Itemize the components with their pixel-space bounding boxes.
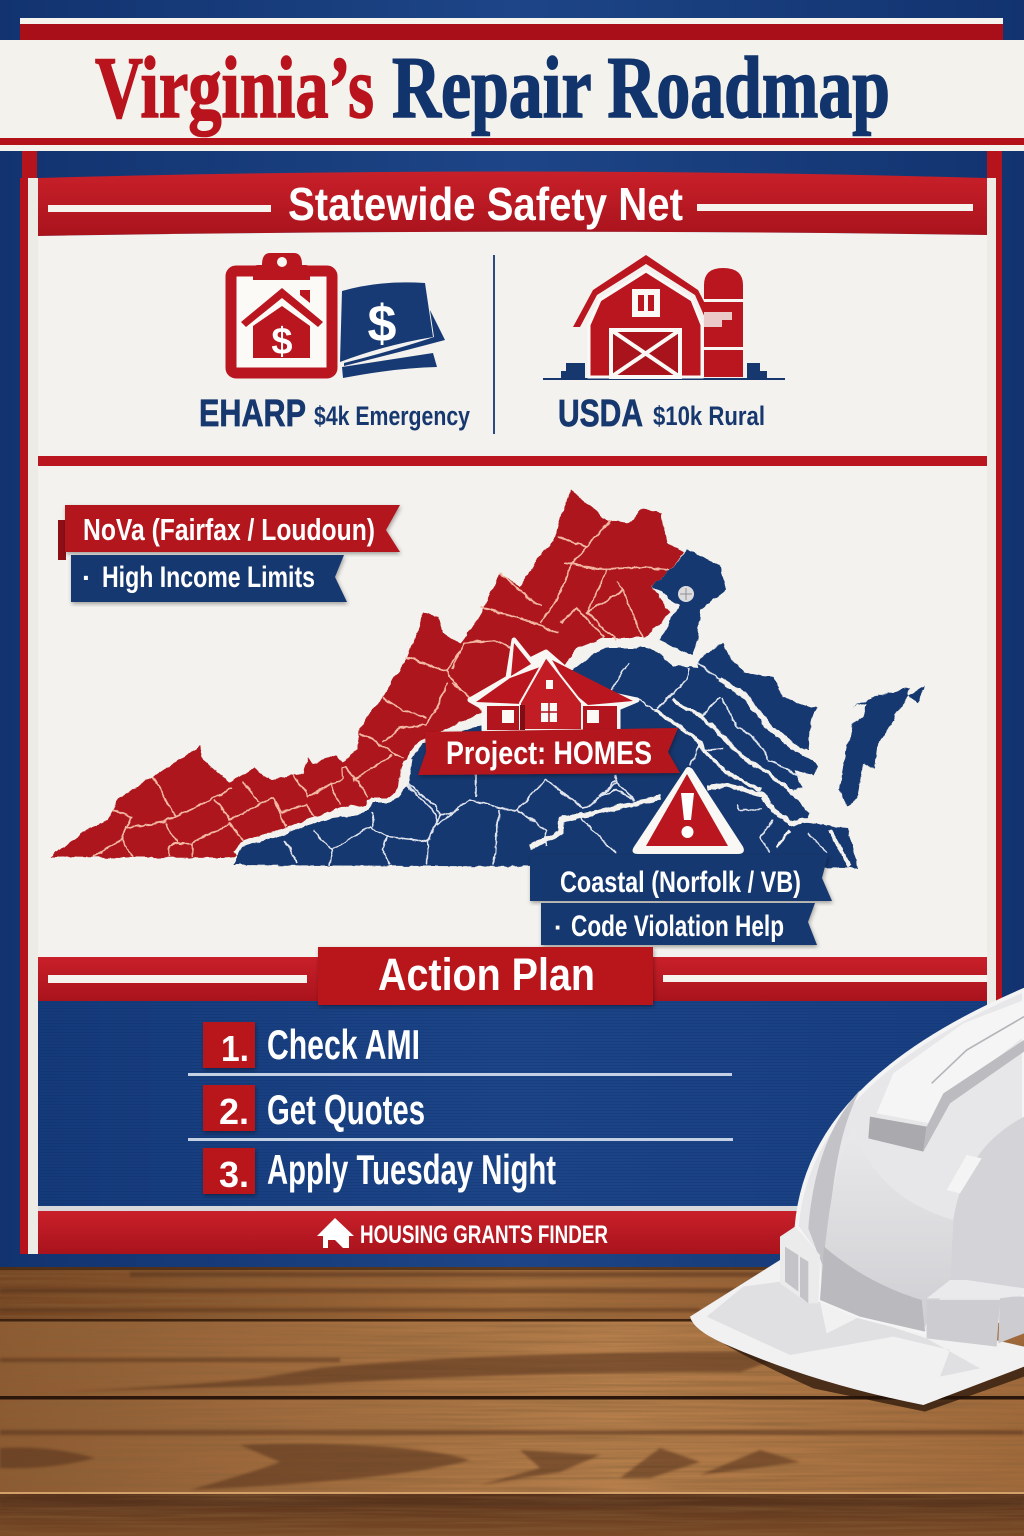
text: EHARP: EHARP <box>199 393 306 435</box>
footer band <box>38 1206 838 1254</box>
map border: red / blue gap <box>236 644 697 853</box>
hat shadow <box>690 1320 1024 1412</box>
top ridge <box>877 1000 1024 1123</box>
vertical divider <box>493 255 495 434</box>
step 1 <box>203 1021 420 1069</box>
hat brim <box>690 1260 1024 1405</box>
wood table <box>0 1267 1024 1536</box>
map region: Eastern Shore <box>840 685 925 807</box>
second divider <box>188 1138 733 1141</box>
footer band: HOUSING GRANTS FINDER <box>360 1221 608 1249</box>
ridge side <box>923 1040 1024 1152</box>
callout: Coastal: Code Violation Help <box>571 910 784 943</box>
step 2 <box>203 1085 425 1133</box>
title: Virginia’s <box>95 40 374 137</box>
callout: Coastal: Coastal (Norfolk / VB) <box>560 866 801 899</box>
dome right lobe <box>950 1117 1024 1288</box>
divider <box>188 1073 732 1076</box>
icon: house logo <box>317 1218 354 1248</box>
heading band: statewide safety net <box>38 172 987 236</box>
left clip <box>780 1227 820 1303</box>
callout: Coastal <box>530 855 832 945</box>
right clip <box>927 1297 1024 1347</box>
icon: warning triangle <box>634 768 743 853</box>
title second part: Repair Roadmap <box>392 40 890 137</box>
map region: NoVa blue <box>652 550 726 655</box>
icon: clipboard with house and cash: $ <box>271 321 293 363</box>
text: EHARP <box>199 393 470 435</box>
callout: NoVa <box>58 505 400 602</box>
top red strip <box>20 18 1003 40</box>
text: USDA: $10k Rural <box>653 401 765 431</box>
text: EHARP: $4k Emergency <box>314 401 470 431</box>
icon: project house <box>470 640 637 730</box>
map marker: DC <box>678 586 694 602</box>
callout: Project HOMES: Project: HOMES <box>446 735 652 771</box>
heading: action plan <box>38 947 987 1005</box>
step 3: Apply Tuesday Night <box>267 1146 556 1193</box>
highlight <box>947 1155 982 1193</box>
panel: grants <box>38 232 987 457</box>
divider band between grants and map <box>38 456 987 466</box>
callout: NoVa: · <box>82 562 91 593</box>
heading band: statewide safety net: Statewide Safety Net <box>288 178 683 230</box>
heading: action plan: Action Plan <box>378 949 595 1000</box>
icon: clipboard with house and cash <box>231 253 445 378</box>
text: USDA: USDA <box>558 393 643 435</box>
icon: barn and silo <box>543 255 785 380</box>
step 3 <box>203 1146 556 1195</box>
step 1: 1. <box>221 1028 249 1069</box>
dome lower wedge <box>820 1247 925 1332</box>
dome center lobe <box>822 1127 953 1327</box>
ridge block <box>868 1117 927 1152</box>
ridge slit <box>932 1017 1024 1083</box>
chart: Virginia map <box>50 490 925 868</box>
step 2: 2. <box>219 1091 249 1132</box>
step 3: 3. <box>219 1154 249 1195</box>
panel: action plan <box>38 1000 987 1208</box>
hat dome <box>797 990 1024 1333</box>
side frame of poster <box>20 151 1002 1254</box>
icon: white hard hat <box>690 990 1024 1412</box>
callout: Project HOMES <box>418 728 680 775</box>
dome left strip <box>808 1090 860 1267</box>
blue panel weave texture <box>38 1000 987 1208</box>
right clip top <box>927 1280 1024 1298</box>
panel: map background <box>38 466 987 958</box>
callout: Coastal: · <box>554 912 563 942</box>
map region: southern and coastal blue <box>233 643 858 868</box>
callout: NoVa: High Income Limits <box>102 561 315 594</box>
brim shading <box>707 1282 980 1377</box>
map region: western red <box>50 490 684 858</box>
panel: title banner <box>0 40 1024 151</box>
callout: NoVa: NoVa (Fairfax / Loudoun) <box>83 512 375 547</box>
text: USDA <box>558 393 765 435</box>
icon: clipboard with house and cash: $ <box>368 295 397 353</box>
step 1: Check AMI <box>267 1021 420 1068</box>
left clip face <box>785 1247 808 1303</box>
list: action steps <box>188 1021 733 1195</box>
step 2: Get Quotes <box>267 1086 425 1133</box>
